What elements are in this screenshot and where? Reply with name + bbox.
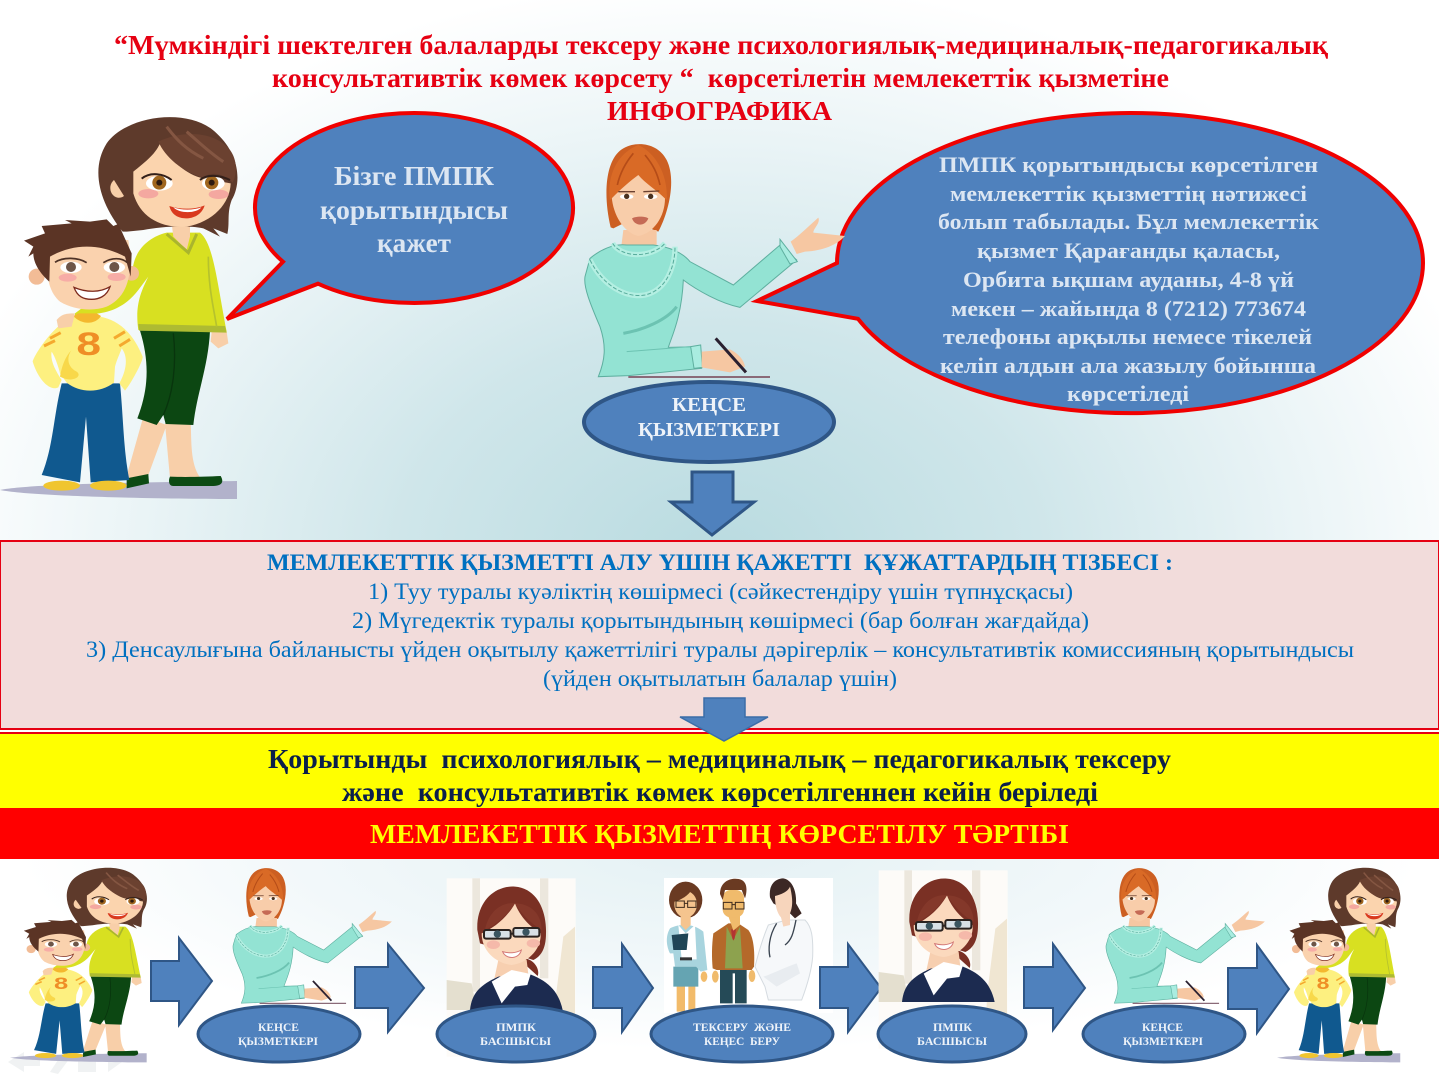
speech bubble: clerk: Орбита ықшам ауданы, 4-8 үй bbox=[963, 267, 1294, 292]
step 4: examination team bbox=[651, 878, 833, 1062]
speech bubble: clerk bbox=[757, 113, 1423, 413]
step 7: mother and son bbox=[1277, 868, 1400, 1062]
man in brown jacket bbox=[712, 879, 755, 1003]
oval label bbox=[198, 1006, 360, 1062]
oval label bbox=[651, 1006, 833, 1062]
arrow: step 3 to 4 bbox=[593, 944, 653, 1032]
panel: result statement bbox=[0, 732, 1439, 808]
step 1: mother and son bbox=[10, 868, 147, 1062]
speech bubble: clerk: мемлекеттік қызметтің нәтижесі bbox=[950, 181, 1307, 206]
oval label: ПМПК bbox=[496, 1020, 536, 1034]
speech bubble: clerk: болып табылады. Бұл мемлекеттік bbox=[938, 209, 1319, 234]
icon: mother and son bbox=[0, 117, 237, 499]
oval label bbox=[1083, 1006, 1245, 1062]
panel: required documents: МЕМЛЕКЕТТІК ҚЫЗМЕТТІ АЛУ ҮШІН ҚАЖЕТТІ ҚҰЖАТТАРДЫҢ ТІЗБЕСІ : bbox=[267, 550, 1173, 575]
panel: result statement: және консультативтік көмек көрсетілгеннен кейін беріледі bbox=[342, 777, 1099, 807]
arrow: step 1 to 2 bbox=[151, 938, 212, 1025]
oval label bbox=[878, 1006, 1026, 1062]
oval label: office clerk bbox=[584, 382, 834, 462]
doctor bbox=[755, 878, 813, 1000]
oval label: ҚЫЗМЕТКЕРІ bbox=[1123, 1034, 1203, 1048]
oval label: ҚЫЗМЕТКЕРІ bbox=[238, 1034, 318, 1048]
speech bubble: clerk: келіп алдын ала жазылу бойынша bbox=[940, 353, 1316, 378]
oval label: БАСШЫСЫ bbox=[480, 1034, 551, 1048]
background: lower panel bbox=[0, 859, 1439, 1080]
speech bubble: parent: Бізге ПМПК bbox=[334, 161, 494, 191]
step 2: office clerk bbox=[198, 868, 392, 1062]
arrow: step 6 to 7 bbox=[1228, 945, 1289, 1033]
speech bubble: clerk: ПМПК қорытындысы көрсетілген bbox=[939, 152, 1318, 177]
step 5: PMPK head bbox=[878, 870, 1026, 1062]
speech bubble: parent: қорытындысы bbox=[320, 195, 508, 225]
oval label: office clerk: КЕҢСЕ bbox=[672, 394, 746, 416]
title bbox=[114, 30, 1328, 126]
background: upper panel bbox=[0, 0, 1439, 540]
arrow: down to documents bbox=[671, 472, 754, 535]
panel: required documents bbox=[0, 541, 1439, 729]
panel: required documents: 2) Мүгедектік туралы қорытындының көшірмесі (бар болған жағдайда) bbox=[352, 608, 1089, 633]
panel: required documents: 1) Туу туралы куәліктің көшірмесі (сәйкестендіру үшін түпнұсқасы) bbox=[368, 579, 1073, 604]
icon: office clerk bbox=[585, 144, 845, 377]
panel: service procedure heading: МЕМЛЕКЕТТІК ҚЫЗМЕТТІҢ КӨРСЕТІЛУ ТӘРТІБІ bbox=[370, 819, 1069, 849]
oval label: КЕҢСЕ bbox=[258, 1020, 299, 1034]
arrow: step 4 to 5 bbox=[820, 944, 881, 1032]
icon: faint slide navigation arrows bbox=[8, 1052, 122, 1074]
title: “Мүмкіндігі шектелген балаларды тексеру және психологиялық-медициналық-педагогикалық bbox=[114, 30, 1328, 60]
speech bubble: parent bbox=[227, 113, 573, 319]
arrow: down to result bbox=[680, 698, 768, 741]
oval label: office clerk: ҚЫЗМЕТКЕРІ bbox=[638, 419, 780, 441]
oval label: КЕҢЕС БЕРУ bbox=[704, 1034, 780, 1048]
title: консультативтік көмек көрсету “ көрсетілетін мемлекеттік қызметіне bbox=[272, 63, 1169, 93]
panel: service procedure heading bbox=[0, 808, 1439, 859]
step 3: PMPK head bbox=[437, 878, 595, 1062]
oval label: ПМПК bbox=[933, 1020, 972, 1034]
speech bubble: clerk: мекен – жайында 8 (7212) 773674 bbox=[951, 296, 1306, 321]
speech bubble: parent: қажет bbox=[377, 228, 451, 258]
arrow: step 5 to 6 bbox=[1024, 944, 1085, 1030]
speech bubble: clerk: көрсетіледі bbox=[1067, 381, 1189, 406]
oval label: ТЕКСЕРУ ЖӘНЕ bbox=[693, 1020, 791, 1034]
title: ИНФОГРАФИКА bbox=[607, 96, 833, 126]
panel: required documents: (үйден оқытылатын балалар үшін) bbox=[543, 666, 897, 691]
woman with folder bbox=[667, 882, 707, 1012]
panel: required documents: 3) Денсаулығына байланысты үйден оқытылу қажеттілігі туралы дәрігерлік – консультативтік комиссияның қорытындысы bbox=[86, 637, 1354, 662]
panel: result statement: Қорытынды психологиялық – медициналық – педагогикалық тексеру bbox=[268, 744, 1172, 774]
speech bubble: clerk: қызмет Қарағанды қаласы, bbox=[977, 238, 1280, 263]
speech bubble: clerk: телефоны арқылы немесе тікелей bbox=[943, 324, 1312, 349]
oval label: КЕҢСЕ bbox=[1142, 1020, 1183, 1034]
oval label bbox=[437, 1006, 595, 1062]
arrow: step 2 to 3 bbox=[355, 944, 424, 1032]
step 6: office clerk bbox=[1083, 868, 1265, 1062]
oval label: БАСШЫСЫ bbox=[917, 1034, 987, 1048]
